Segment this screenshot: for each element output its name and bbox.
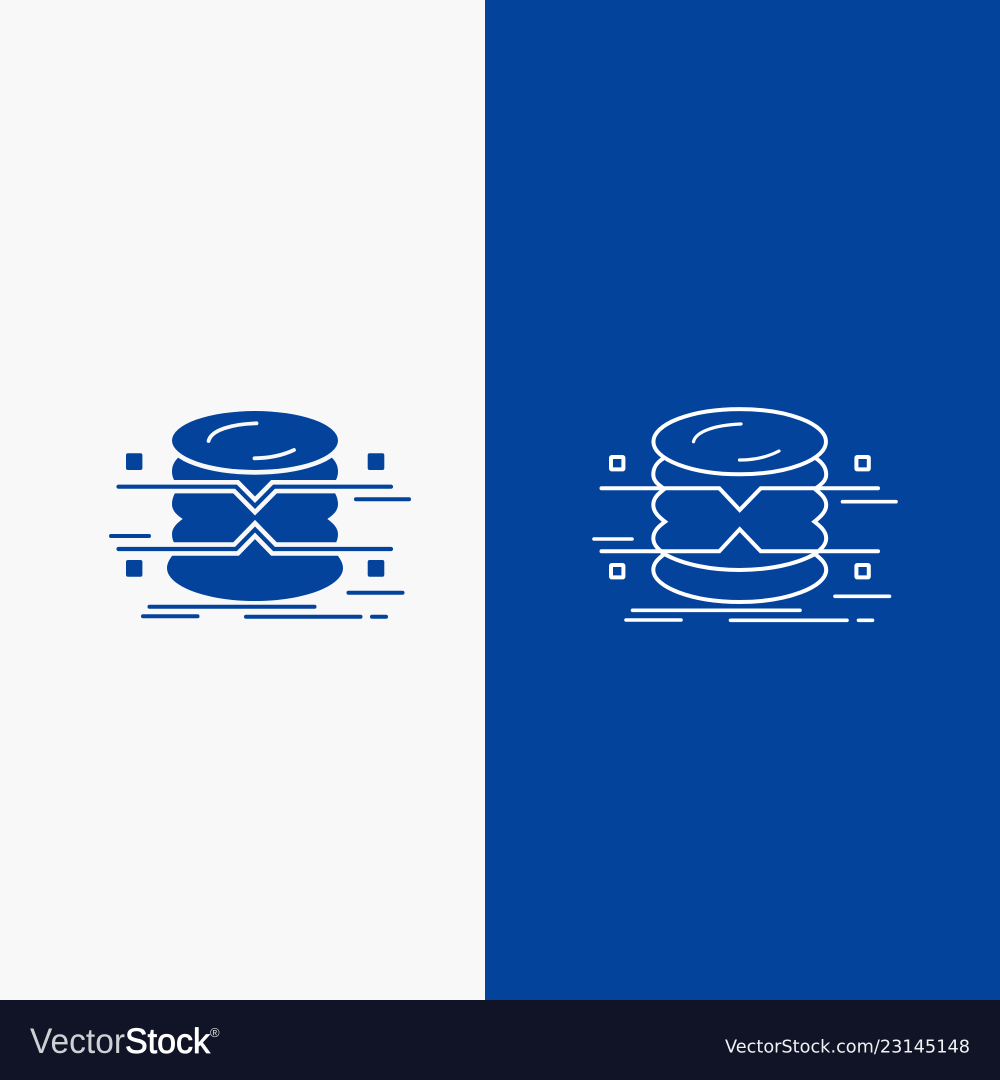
outline stacked lobes bbox=[653, 458, 826, 602]
footer bar bbox=[0, 1000, 1000, 1080]
glyph upper break line bbox=[118, 487, 391, 506]
outline lower disk arc bbox=[664, 554, 815, 570]
glyph speed lines bbox=[111, 499, 409, 617]
glyph stacked disk body bbox=[167, 456, 343, 601]
glyph lower line halo bbox=[160, 530, 350, 549]
footer logo: VectorStock bbox=[30, 1022, 220, 1061]
footer logo: VectorStock: ® bbox=[210, 1025, 220, 1040]
outline disk highlights bbox=[694, 424, 779, 460]
outline lower break line bbox=[602, 529, 878, 551]
glyph upper line halo bbox=[160, 487, 350, 506]
glyph top disk gap bbox=[172, 411, 338, 470]
footer image id: VectorStock.com/23145148 bbox=[725, 1037, 970, 1058]
panel: light left background bbox=[0, 0, 485, 1000]
panel: blue right background bbox=[485, 0, 1000, 1000]
icon: solid glyph database bbox=[111, 411, 409, 617]
footer logo: VectorStock: Vector bbox=[30, 1022, 125, 1061]
outline top disk bbox=[653, 409, 826, 474]
glyph disk highlights bbox=[209, 423, 294, 458]
outline speed lines bbox=[594, 502, 896, 620]
icon: line outline database bbox=[594, 409, 896, 620]
outline corner squares bbox=[611, 457, 869, 577]
footer logo: VectorStock: Stock bbox=[125, 1022, 210, 1061]
outline upper break line bbox=[602, 488, 878, 510]
glyph lower break line bbox=[118, 530, 391, 549]
glyph corner squares bbox=[126, 453, 384, 577]
